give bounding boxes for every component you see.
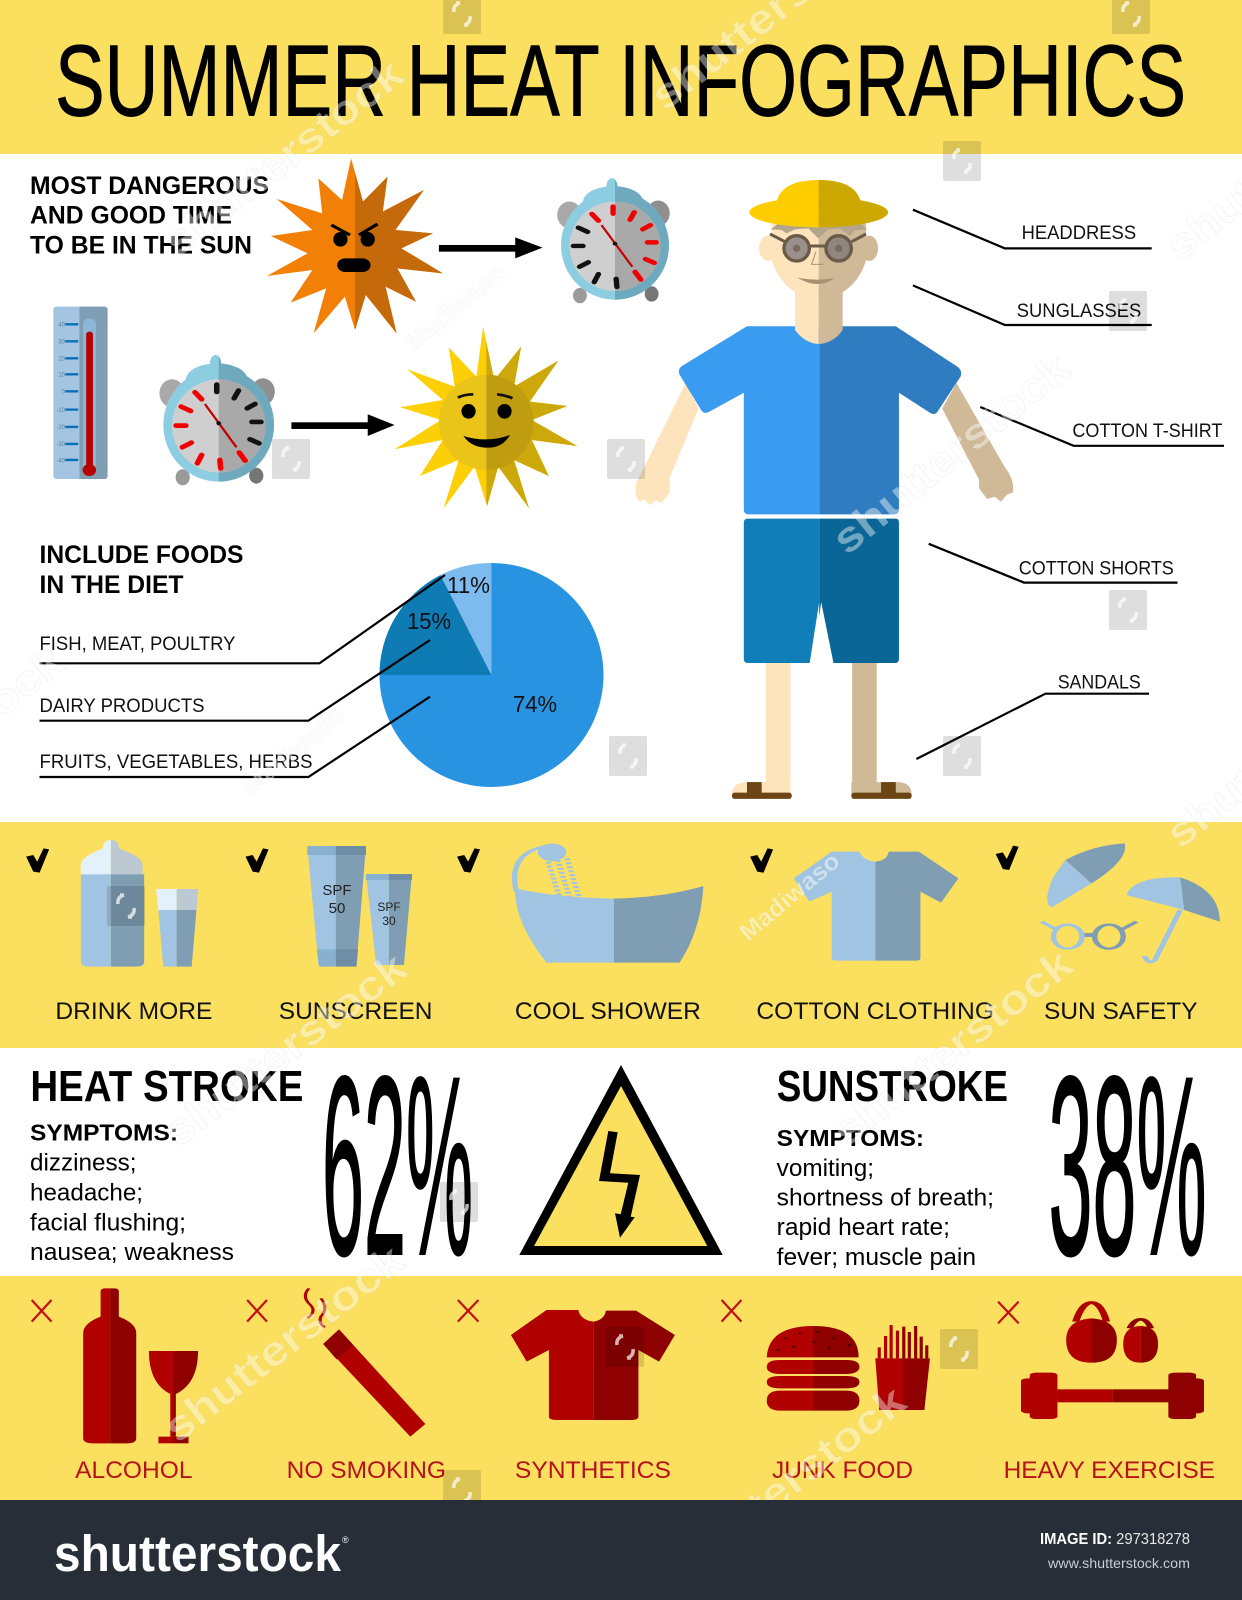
watermark overlay: shutterstock xyxy=(155,1235,413,1451)
arrow: to good sun xyxy=(291,414,395,436)
icon: thermometer: -40 xyxy=(56,458,66,464)
icon: thermometer: 10 xyxy=(58,372,66,378)
website: www.shutterstock.com xyxy=(1047,1555,1190,1571)
watermark overlay: shutterstock xyxy=(657,1376,915,1592)
band labels: do this: DRINK MORE xyxy=(55,998,212,1025)
callouts: clothing xyxy=(913,210,1224,759)
checkmarks xyxy=(26,846,1019,873)
shorts xyxy=(744,519,899,663)
heading: include foods: INCLUDE FOODS xyxy=(40,541,244,569)
watermark overlay: shutterstock xyxy=(824,939,1082,1155)
sandals xyxy=(732,782,912,799)
pie chart: diet: 11% xyxy=(447,572,490,598)
heading: dangerous time: AND GOOD TIME xyxy=(30,202,232,230)
panel: heat stroke: headache; xyxy=(30,1180,143,1207)
band labels: avoid: ALCOHOL xyxy=(75,1457,192,1484)
band labels: do this: SUNSCREEN xyxy=(279,998,432,1025)
icon: cigarette xyxy=(305,1288,425,1437)
icon: bathtub and shower xyxy=(515,844,703,963)
band labels: do this: COOL SHOWER xyxy=(515,998,701,1025)
t-shirt xyxy=(679,326,961,514)
icon: thermometer: 30 xyxy=(58,340,66,346)
band labels: avoid: JUNK FOOD xyxy=(772,1457,913,1484)
panel: heat stroke: facial flushing; xyxy=(30,1210,186,1237)
band labels: avoid: HEAVY EXERCISE xyxy=(1004,1457,1215,1484)
panel: sunstroke: SYMPTOMS: xyxy=(777,1125,924,1151)
icon: sunscreen tubes xyxy=(307,846,412,967)
band labels: avoid: SYNTHETICS xyxy=(515,1457,671,1484)
pie legend labels: FISH, MEAT, POULTRY xyxy=(40,634,236,655)
pie chart: diet xyxy=(379,563,604,787)
footer logo: shutterstock xyxy=(54,1525,342,1582)
footer bar: ® xyxy=(342,1535,349,1545)
cross marks xyxy=(32,1300,1019,1323)
panel: sunstroke xyxy=(777,1062,1008,1271)
watermark overlay: shutterstock xyxy=(155,943,416,1155)
panel: sunstroke: fever; muscle pain xyxy=(777,1244,976,1271)
icon: thermometer: 0 xyxy=(62,390,66,396)
panel: heat stroke: SYMPTOMS: xyxy=(30,1120,178,1146)
header banner xyxy=(0,0,1242,154)
icon: thermometer xyxy=(53,307,108,479)
watermark overlay: Madiwaso xyxy=(735,847,845,947)
heading: dangerous time: MOST DANGEROUS xyxy=(30,172,269,200)
icon: thermometer: -30 xyxy=(56,442,66,448)
callout labels: SANDALS xyxy=(1058,673,1141,694)
watermark overlay: shutterstock xyxy=(823,344,1079,563)
callout labels xyxy=(1017,223,1223,694)
pie legend labels: DAIRY PRODUCTS xyxy=(40,696,204,717)
icon: alarm clock danger time xyxy=(557,178,670,303)
panel: avoid band xyxy=(0,1276,1242,1500)
panel: heat stroke xyxy=(30,1062,303,1266)
icon: warning triangle xyxy=(519,1065,723,1255)
panel: heat stroke: nausea; weakness xyxy=(30,1239,234,1266)
footer bar xyxy=(0,1500,1242,1600)
icon: weights xyxy=(1021,1303,1204,1419)
icon: sunscreen tubes: 50 xyxy=(329,900,345,917)
pie chart: diet: 74% xyxy=(513,691,557,717)
icon: bottle and wine glass xyxy=(83,1288,198,1443)
band labels: avoid: NO SMOKING xyxy=(287,1457,446,1484)
icon: sunscreen tubes: 30 xyxy=(382,914,396,928)
icon: bottle and glass xyxy=(81,840,198,967)
icon: thermometer: 40 xyxy=(58,322,66,328)
icon: smiling sun xyxy=(395,327,577,508)
icon: alarm clock safe time xyxy=(159,355,275,485)
callout labels: HEADDRESS xyxy=(1022,223,1136,244)
arrow: to midday clock xyxy=(439,237,542,258)
icon: thermometer: -10 xyxy=(56,408,66,414)
heading: dangerous time xyxy=(30,172,269,260)
icon: thermometer: -20 xyxy=(56,425,66,431)
heading: dangerous time: TO BE IN THE SUN xyxy=(30,232,252,260)
panel: heat stroke: HEAT STROKE xyxy=(30,1062,303,1111)
watermark overlay: Madiwaso xyxy=(401,257,511,357)
head xyxy=(749,180,888,344)
icon: sunscreen tubes: SPF xyxy=(322,882,352,899)
image id: IMAGE ID: 297318278 xyxy=(1040,1531,1190,1548)
figure: man in summer clothes xyxy=(635,180,1013,799)
hat xyxy=(749,180,888,227)
panel: sunstroke: vomiting; xyxy=(777,1155,874,1182)
icon: sunscreen tubes: SPF xyxy=(377,900,401,914)
icon: hat, glasses, umbrella xyxy=(1042,843,1220,962)
callout labels: SUNGLASSES xyxy=(1017,301,1141,322)
band labels: do this: SUN SAFETY xyxy=(1044,998,1198,1025)
heading: include foods: IN THE DIET xyxy=(40,571,184,599)
panel: sunstroke: rapid heart rate; xyxy=(777,1214,950,1241)
panel: do this band xyxy=(0,822,1242,1048)
band labels: avoid xyxy=(75,1457,1215,1484)
pie chart: diet: 15% xyxy=(407,608,451,634)
heading: include foods xyxy=(40,541,244,599)
icon: synthetic shirt xyxy=(511,1310,675,1420)
watermark overlay: shutterstock xyxy=(155,49,413,265)
icon: angry sun xyxy=(267,158,443,333)
icon: thermometer: 20 xyxy=(58,356,66,362)
icon: burger and fries xyxy=(767,1325,930,1411)
icon: cotton shirt xyxy=(794,852,958,961)
band labels: do this: COTTON CLOTHING xyxy=(756,998,994,1025)
panel: sunstroke: shortness of breath; xyxy=(777,1185,994,1212)
watermark overlay: Madiwaso xyxy=(239,701,349,801)
body xyxy=(635,326,1013,799)
pie legend labels: FRUITS, VEGETABLES, HERBS xyxy=(40,752,312,773)
panel: heat stroke: dizziness; xyxy=(30,1150,136,1177)
callout labels: COTTON T-SHIRT xyxy=(1072,421,1223,442)
panel: sunstroke: SUNSTROKE xyxy=(777,1062,1008,1111)
text: 62% xyxy=(322,1024,473,1309)
pie legend labels xyxy=(40,575,445,777)
callout labels: COTTON SHORTS xyxy=(1019,559,1174,580)
band labels: do this xyxy=(55,998,1198,1025)
